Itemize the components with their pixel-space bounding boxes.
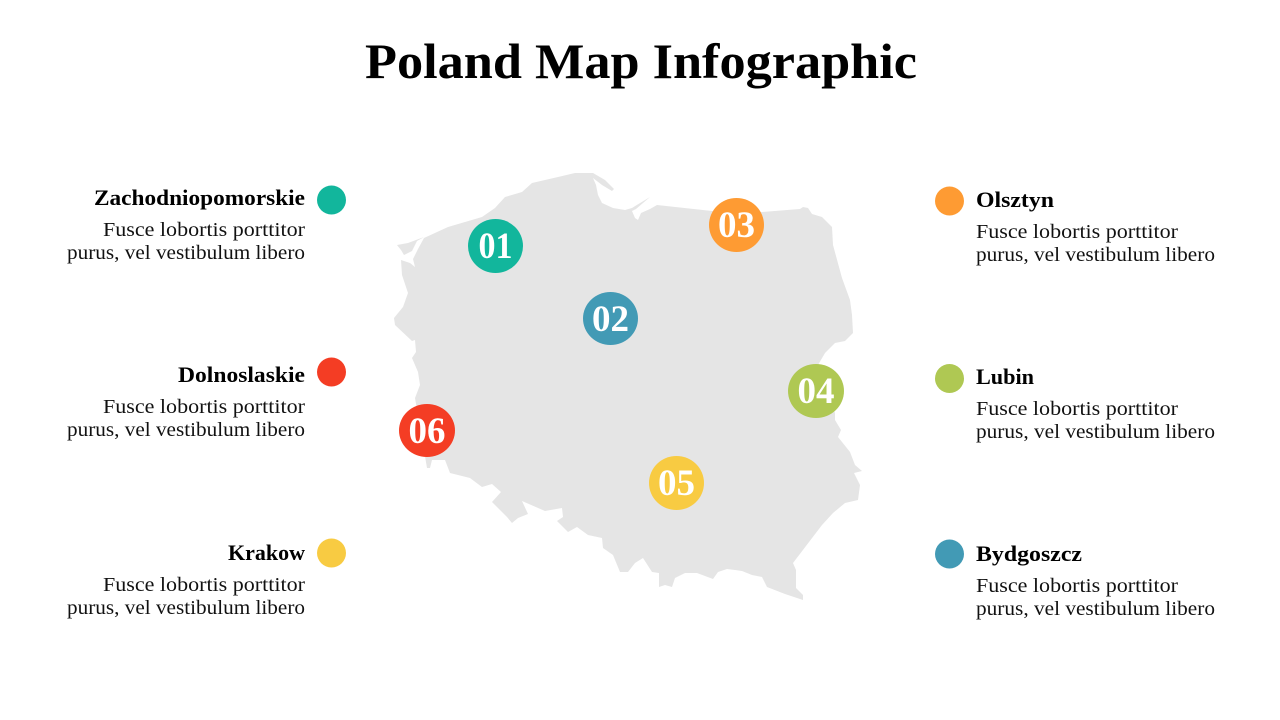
- marker 05: 05: [658, 463, 695, 504]
- panel: Bydgoszcz: [935, 540, 1215, 620]
- panel: Lubin: purus, vel vestibulum libero: [976, 421, 1215, 443]
- marker 02: 02: [592, 299, 629, 340]
- panel: Olsztyn: purus, vel vestibulum libero: [976, 244, 1215, 266]
- panel: Dolnoslaskie: purus, vel vestibulum libero: [67, 419, 305, 441]
- panel: Dolnoslaskie: [67, 358, 346, 441]
- panel: Krakow: Fusce lobortis porttitor: [103, 574, 305, 596]
- panel: Lubin: Fusce lobortis porttitor: [976, 398, 1178, 420]
- marker 03: 03: [718, 205, 755, 246]
- panel: Krakow: Krakow: [228, 540, 305, 565]
- panel: Lubin: [935, 364, 1215, 443]
- panel: Olsztyn: [935, 186, 1215, 266]
- marker 06: [399, 404, 455, 457]
- marker 02: [583, 292, 638, 345]
- panel: Zachodniopomorskie: purus, vel vestibulum libero: [67, 242, 305, 264]
- panel: Bydgoszcz: Bydgoszcz: [976, 541, 1082, 566]
- marker 03: [709, 198, 764, 252]
- panel: Zachodniopomorskie: Fusce lobortis porttitor: [103, 219, 305, 241]
- panel: Dolnoslaskie: Dolnoslaskie: [178, 362, 305, 387]
- marker 01: 01: [478, 226, 512, 267]
- panel: Krakow: purus, vel vestibulum libero: [67, 597, 305, 619]
- panel: Lubin: Lubin: [976, 364, 1034, 389]
- marker 04: [788, 364, 844, 418]
- marker 05: [649, 456, 704, 510]
- title: Poland Map Infographic: [365, 33, 917, 89]
- panel: Zachodniopomorskie: Zachodniopomorskie: [94, 185, 305, 210]
- marker 06: 06: [408, 411, 446, 452]
- panel: Bydgoszcz: purus, vel vestibulum libero: [976, 598, 1215, 620]
- marker 04: 04: [798, 371, 834, 412]
- map of Poland: [394, 173, 862, 600]
- panel: Zachodniopomorskie: [67, 185, 346, 264]
- panel: Dolnoslaskie: Fusce lobortis porttitor: [103, 396, 305, 418]
- panel: Bydgoszcz: Fusce lobortis porttitor: [976, 575, 1178, 597]
- panel: Olsztyn: Olsztyn: [976, 187, 1054, 212]
- marker 01: [468, 219, 523, 273]
- panel: Olsztyn: Fusce lobortis porttitor: [976, 221, 1178, 243]
- panel: Krakow: [67, 538, 346, 619]
